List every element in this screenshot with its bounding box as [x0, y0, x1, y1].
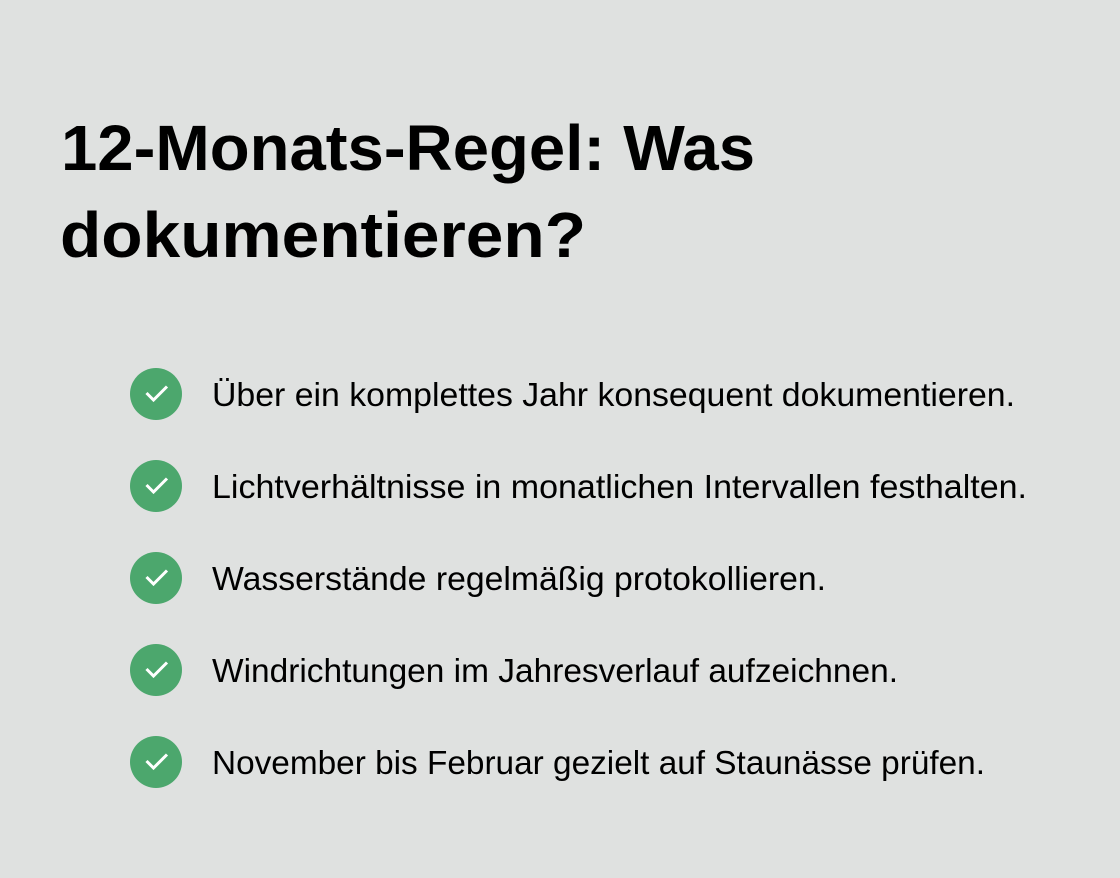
item 3: Wasserstände regelmäßig protokollieren. — [212, 560, 826, 597]
checklist — [130, 368, 1027, 788]
item 3 — [130, 552, 826, 604]
item 1: Über ein komplettes Jahr konsequent dokumentieren. — [212, 376, 1015, 413]
item 5 — [130, 736, 985, 788]
item 2: Lichtverhältnisse in monatlichen Intervallen festhalten. — [212, 468, 1027, 505]
item 4 — [130, 644, 898, 696]
item 5: November bis Februar gezielt auf Staunässe prüfen. — [212, 744, 985, 781]
item 4: Windrichtungen im Jahresverlauf aufzeichnen. — [212, 652, 898, 689]
title — [60, 112, 755, 271]
item 2 — [130, 460, 1027, 512]
title: dokumentieren? — [60, 199, 586, 271]
item 1 — [130, 368, 1015, 420]
title: 12-Monats-Regel: Was — [61, 112, 755, 184]
